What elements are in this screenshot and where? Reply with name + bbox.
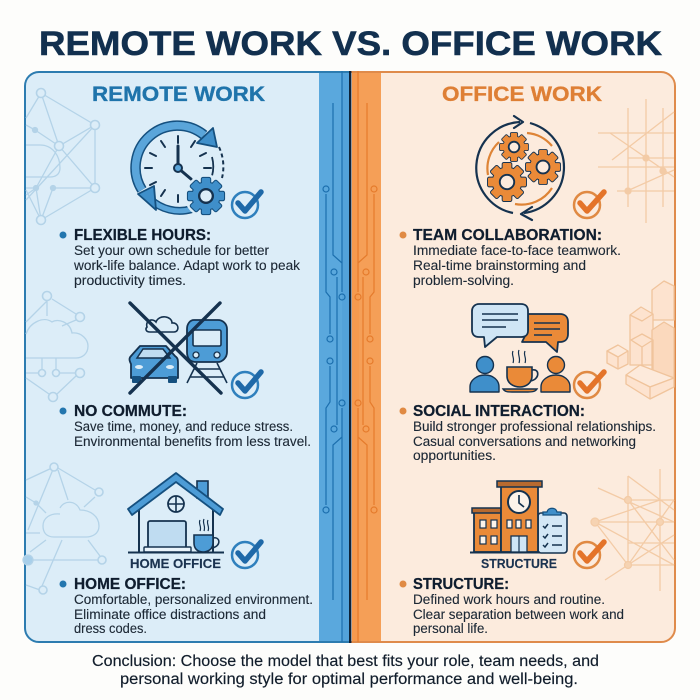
panel heading: remote work: REMOTE WORK [92,83,265,106]
bullet text: flexible hours [60,227,300,288]
icon: gears with circular arrows [476,116,564,220]
conclusion: personal working style for optimal performance and well-being. [120,671,578,688]
bullet text: team collaboration: Real-time brainstorming and [413,258,586,273]
bullet text: social interaction: Build stronger professional relationships. [413,419,656,434]
icon: clock with arrows and gear [136,126,228,218]
bullet text: flexible hours: work-life balance. Adapt work to peak [73,258,300,273]
bullet text: home office: dress codes. [74,621,147,636]
bullet text: no commute: Save time, money, and reduce stress. [74,419,293,434]
bullet text: structure: Clear separation between work and [413,607,624,622]
bullet text: social interaction [400,403,656,463]
background lattice bottom right [591,469,674,591]
center divider with circuit strips [319,71,381,643]
bullet text: flexible hours: FLEXIBLE HOURS: [74,227,211,244]
bullet text: team collaboration: problem-solving. [413,273,514,288]
background grid top right [598,99,674,223]
bullet text: no commute [60,403,311,449]
panel: office work [350,72,675,642]
icon: check mark [232,192,261,218]
icon: check mark [574,192,604,218]
bullet text: team collaboration: Immediate face-to-face teamwork. [413,243,621,258]
bullet text: team collaboration [400,227,621,288]
bullet text: flexible hours: productivity times. [74,273,186,288]
icon: crossed out car and train [130,303,227,393]
bullet text: home office [60,576,313,636]
icon: office building with clipboard [470,481,567,571]
bullet text: social interaction: SOCIAL INTERACTION: [413,403,585,420]
bullet text: structure: Defined work hours and routine. [413,592,605,607]
conclusion: Conclusion: Choose the model that best fits your role, team needs, and [92,653,599,670]
bullet text: structure [400,576,624,636]
icon: conversation over coffee [470,304,570,392]
bullet text: home office: Eliminate office distractions and [74,607,266,622]
bullet text: structure: STRUCTURE: [413,576,509,593]
icon: check mark [232,542,261,568]
bullet text: no commute: NO COMMUTE: [74,403,187,420]
bullet text: home office: HOME OFFICE: [74,576,186,593]
background isometric blocks [607,281,674,399]
conclusion [92,653,599,688]
panel heading: office work: OFFICE WORK [442,83,602,106]
panel: remote work [23,72,350,642]
background network bottom left [23,463,106,594]
bullet text: team collaboration: TEAM COLLABORATION: [413,227,602,244]
background network top left [26,88,100,224]
bullet text: no commute: Environmental benefits from less travel. [74,434,311,449]
icon: check mark [232,372,261,398]
bullet text: structure: personal life. [413,621,488,636]
bullet text: home office: Comfortable, personalized environment. [74,592,313,607]
icon label: STRUCTURE [481,557,557,571]
icon: check mark [574,372,604,398]
bullet text: social interaction: Casual conversations and networking [413,434,636,449]
icon: home office house [128,473,224,571]
bullet text: flexible hours: Set your own schedule for better [74,243,270,258]
background network middle left [26,292,88,402]
icon label: HOME OFFICE [130,557,221,571]
bullet text: social interaction: opportunities. [413,448,496,463]
icon: check mark [574,542,604,568]
title: REMOTE WORK VS. OFFICE WORK [39,25,662,63]
